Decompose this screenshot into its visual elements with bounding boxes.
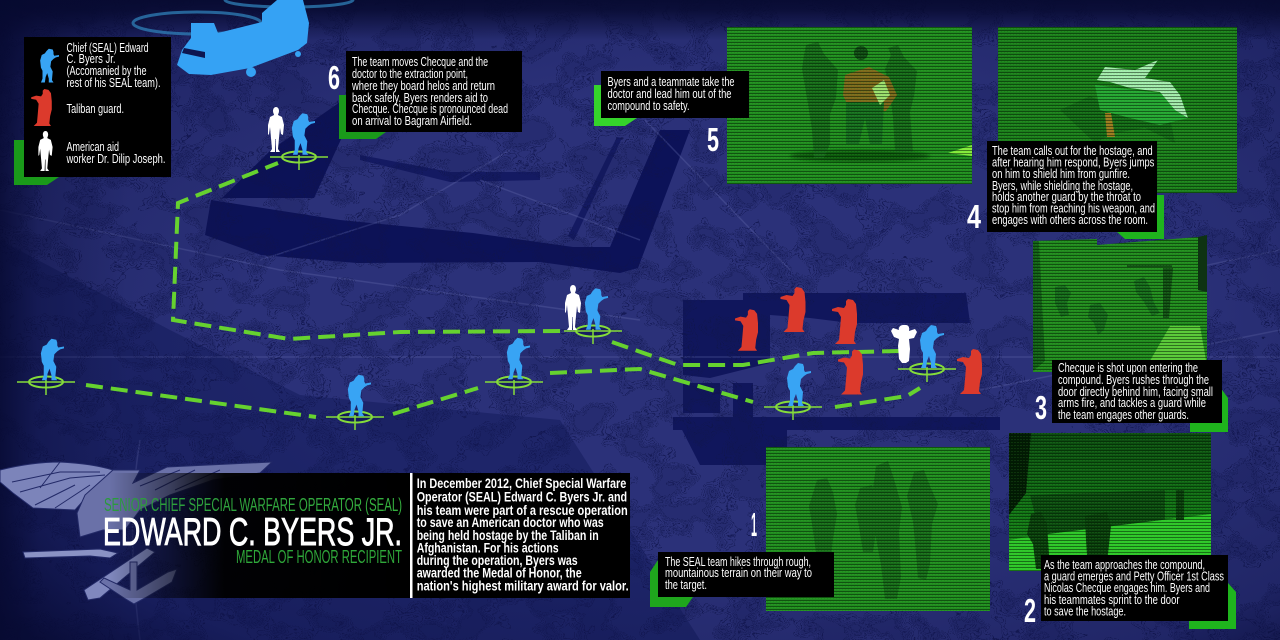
left wing bbox=[0, 462, 113, 510]
intro text block: Operator (SEAL) Edward C. Byers Jr. and bbox=[417, 489, 627, 505]
SEAL positions on approach bbox=[17, 325, 956, 430]
caption 2 with green tab bbox=[1024, 555, 1236, 629]
route lines bbox=[86, 163, 920, 417]
caption 3 with green tab: compound. Byers rushes through the bbox=[1058, 372, 1209, 387]
caption 3 with green tab: arms fire, and tackles a guard while bbox=[1058, 395, 1206, 410]
legend: SEAL icon bbox=[40, 49, 59, 82]
photo 5: doctor led out bbox=[727, 27, 972, 184]
subtitle: rank: SENIOR CHIEF SPECIAL WARFARE OPERATOR (SEAL) bbox=[104, 495, 402, 515]
caption 6 with green tab: The team moves Checque and the bbox=[352, 54, 488, 69]
caption 5 with green tab: compound to safety. bbox=[608, 98, 690, 113]
caption 4 with green tab: holds another guard by the throat to bbox=[992, 189, 1141, 204]
pistol bbox=[23, 549, 118, 558]
title: name: EDWARD C. BYERS JR. bbox=[103, 511, 402, 554]
intro text block: In December 2012, Chief Special Warfare bbox=[417, 475, 626, 491]
dark compound buildings and roads bbox=[205, 100, 1000, 465]
photo 3: entering compound bbox=[1033, 235, 1207, 372]
caption 4 with green tab: after hearing him respond, Byers jumps bbox=[992, 155, 1155, 170]
caption 1 with green tab: mountainous terrain on their way to bbox=[665, 565, 812, 580]
title panel bbox=[90, 473, 630, 598]
figures on the map bbox=[17, 107, 982, 430]
legend panel bbox=[14, 37, 171, 185]
intro text block: awarded the Medal of Honor, the bbox=[417, 565, 582, 581]
caption 6 with green tab: back safely. Byers renders aid to bbox=[352, 90, 488, 105]
legend panel: Taliban guard. bbox=[66, 101, 124, 116]
caption 1 with green tab: 1 bbox=[751, 506, 757, 543]
anchor bbox=[100, 562, 177, 604]
rotor rings bbox=[133, 0, 353, 34]
caption 6 with green tab: doctor to the extraction point, bbox=[352, 66, 468, 81]
caption 3 with green tab: the team engages other guards. bbox=[1058, 407, 1189, 422]
legend panel: C. Byers Jr. bbox=[66, 51, 116, 66]
legend panel: Chief (SEAL) Edward bbox=[66, 40, 148, 55]
intro text block: to save an American doctor who was bbox=[417, 514, 604, 530]
team with doctor leaving compound bbox=[564, 285, 622, 344]
SEAL trident insignia bbox=[0, 462, 272, 604]
caption 1 with green tab: The SEAL team hikes through rough, bbox=[665, 554, 811, 569]
caption 4 with green tab: on him to shield him from gunfire. bbox=[992, 166, 1130, 181]
caption 4 with green tab: The team calls out for the hostage, and bbox=[992, 143, 1153, 158]
caption 2 with green tab: As the team approaches the compound, bbox=[1044, 557, 1205, 572]
subtitle: medal: MEDAL OF HONOR RECIPIENT bbox=[236, 547, 402, 567]
caption 2 with green tab: 2 bbox=[1024, 592, 1036, 629]
caption 3 with green tab bbox=[1035, 360, 1228, 432]
caption 3 with green tab: door directly behind him, facing small bbox=[1058, 384, 1213, 399]
caption 6 with green tab: 6 bbox=[328, 59, 340, 96]
caption 5 with green tab: Byers and a teammate take the bbox=[608, 74, 734, 89]
intro text block bbox=[417, 475, 629, 594]
intro text block: Afghanistan. For his actions bbox=[417, 540, 559, 556]
photo 2: approaching compound bbox=[1009, 433, 1211, 571]
caption 6 with green tab: on arrival to Bagram Airfield. bbox=[352, 113, 472, 128]
intro text block: being held hostage by the Taliban in bbox=[417, 527, 599, 543]
caption 5 with green tab bbox=[594, 71, 749, 158]
caption 6 with green tab: where they board helos and return bbox=[351, 78, 495, 93]
legend panel: worker Dr. Dilip Joseph. bbox=[66, 151, 166, 166]
legend: aid worker icon bbox=[38, 131, 53, 171]
caption 4 with green tab: stop him from reaching his weapon, and bbox=[992, 201, 1155, 216]
photo 1: team hikes bbox=[766, 447, 990, 611]
intro text block: during the operation, Byers was bbox=[417, 552, 578, 568]
legend panel: American aid bbox=[66, 139, 119, 154]
caption 3 with green tab: 3 bbox=[1035, 389, 1047, 426]
legend panel: (Accomanied by the bbox=[66, 63, 146, 78]
caption 3 with green tab: Checque is shot upon entering the bbox=[1058, 360, 1198, 375]
caption 2 with green tab: his teammates sprint to the door bbox=[1044, 592, 1180, 607]
caption 5 with green tab: 5 bbox=[707, 121, 719, 158]
right wing and body bbox=[77, 462, 272, 537]
caption 6 with green tab: Checque. Checque is pronounced dead bbox=[352, 101, 508, 116]
caption 4 with green tab: 4 bbox=[967, 198, 981, 235]
legend panel: rest of his SEAL team). bbox=[66, 75, 160, 90]
caption 5 with green tab: doctor and lead him out of the bbox=[608, 86, 732, 101]
caption 4 with green tab bbox=[967, 141, 1164, 239]
caption 4 with green tab: Byers, while shielding the hostage, bbox=[992, 178, 1133, 193]
caption 4 with green tab: engages with others across the room. bbox=[992, 212, 1148, 227]
caption 2 with green tab: Nicolas Checque engages him. Byers and bbox=[1044, 580, 1210, 595]
caption 1 with green tab: the target. bbox=[665, 577, 707, 592]
trident bbox=[84, 548, 155, 600]
Taliban guards bbox=[735, 287, 982, 394]
helicopter and rotors bbox=[133, 0, 353, 77]
intro text block: his team were part of a rescue operation bbox=[417, 502, 628, 518]
hostage with hands on head bbox=[891, 325, 917, 363]
helicopter body bbox=[177, 0, 309, 77]
legend: guard icon bbox=[31, 89, 52, 126]
intro text block: nation's highest military award for valor. bbox=[417, 578, 629, 594]
photo 4: Byers shields hostage bbox=[998, 27, 1237, 193]
caption 2 with green tab: to save the hostage. bbox=[1044, 604, 1126, 619]
team at extraction point bbox=[268, 107, 328, 170]
caption 6 with green tab bbox=[328, 51, 522, 139]
caption 1 with green tab bbox=[650, 506, 834, 607]
